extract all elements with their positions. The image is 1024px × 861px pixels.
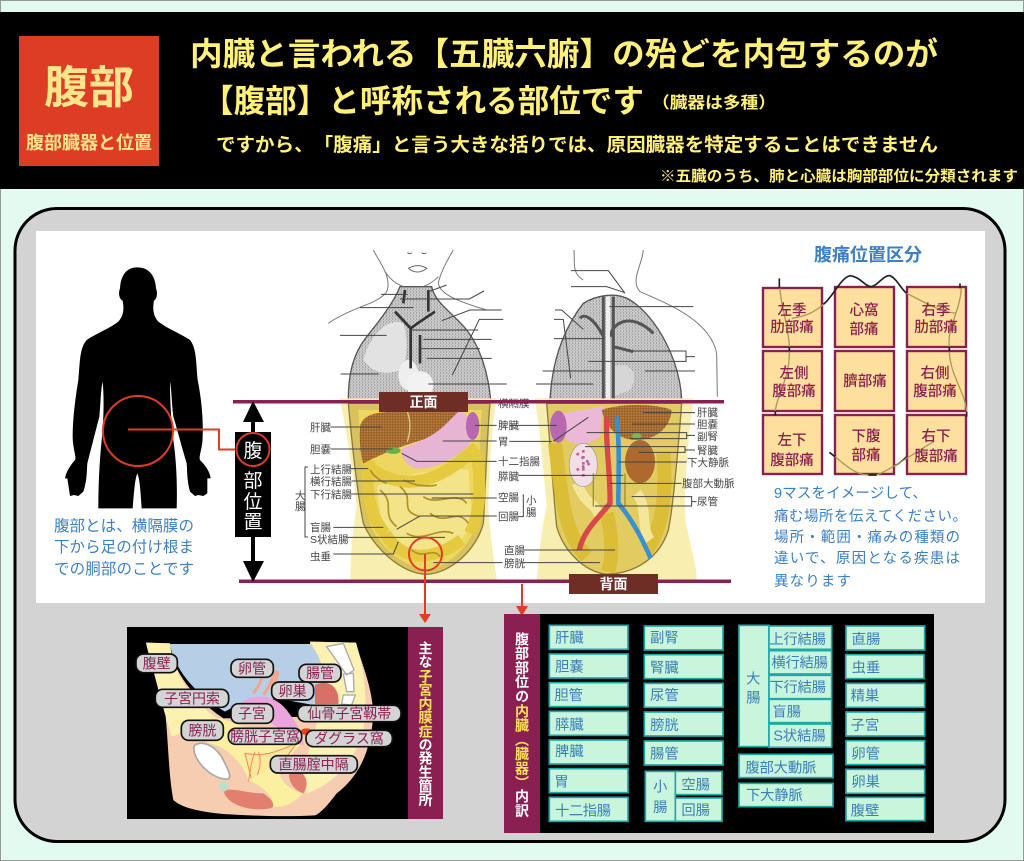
organ column 3 bbox=[739, 625, 833, 807]
organ labels: back right: 肝臓 bbox=[697, 407, 718, 419]
guidance text: 9マスをイメージして、 bbox=[774, 485, 927, 502]
nine square pain grid: 腹部痛 bbox=[772, 383, 816, 400]
small intestine group bbox=[645, 771, 722, 821]
guidance text: 違いで、原因となる疾患は bbox=[774, 550, 960, 567]
label: front view bbox=[379, 392, 468, 412]
pill labels: 仙骨子宮靱帯 bbox=[307, 705, 391, 721]
back view: abdomen bbox=[509, 398, 697, 579]
nine square pain grid: 右下 bbox=[922, 428, 950, 445]
caption: abdomen definition: 腹部とは、横隔膜の bbox=[54, 517, 194, 535]
organ labels: front right: 十二指腸 bbox=[498, 455, 540, 468]
nine square pain grid: 部痛 bbox=[850, 321, 878, 338]
large intestine group: S状結腸 bbox=[773, 728, 826, 745]
organ column 2: 腎臓 bbox=[650, 660, 679, 677]
organ labels: front left: 盲腸 bbox=[310, 522, 331, 534]
label: abdomen position: 位 bbox=[243, 491, 263, 513]
front view: abdomen bbox=[331, 398, 524, 579]
small intestine group: 回腸 bbox=[681, 802, 710, 819]
organ column 4: 虫垂 bbox=[852, 660, 880, 677]
nine square pain grid: 腹部痛 bbox=[913, 383, 957, 400]
organ column 4: 卵巣 bbox=[851, 774, 880, 791]
organ labels: front left: 下行結腸 bbox=[310, 488, 352, 501]
pill labels: 直腸腟中隔 bbox=[279, 756, 349, 772]
pill labels: 腸管 bbox=[306, 665, 334, 681]
organ column 2: 副腎 bbox=[650, 630, 679, 647]
organ labels: front right: 直腸 bbox=[504, 544, 525, 557]
organ column 2: 膀胱 bbox=[650, 717, 679, 734]
nine square pain grid: 右側 bbox=[920, 365, 950, 382]
nine square pain grid: 部痛 bbox=[852, 447, 880, 464]
pill labels: 腹壁 bbox=[143, 655, 171, 671]
organ column 1: 肝臓 bbox=[555, 630, 584, 647]
organ column 4: 卵管 bbox=[851, 746, 880, 763]
organ column 4 bbox=[846, 626, 925, 821]
organ labels: front left: S状結腸 bbox=[310, 533, 349, 546]
title block: 腹部: 腹部 bbox=[44, 62, 134, 113]
headline note: （臓器は多種） bbox=[652, 94, 776, 112]
organ labels: front left: 肝臓 bbox=[310, 422, 331, 434]
organ labels: front right: 回腸 bbox=[498, 511, 519, 523]
organ labels: front right: 空腸 bbox=[498, 492, 519, 504]
guidance text bbox=[774, 485, 967, 590]
organ labels: front left: 上行結腸 bbox=[310, 463, 352, 476]
footnote: ※五臓のうち、肺と心臓は胸部部位に分類されます bbox=[660, 167, 1018, 185]
large intestine group: 下行結腸 bbox=[769, 679, 826, 696]
nine square pain grid: 左季 bbox=[778, 302, 806, 319]
organ labels: front right bbox=[498, 397, 540, 570]
organ column 1: 十二指腸 bbox=[555, 802, 611, 819]
pill labels: 卵管 bbox=[238, 660, 266, 676]
caption: abdomen definition: 下から足の付け根ま bbox=[54, 538, 194, 556]
label: back view bbox=[569, 574, 658, 594]
panel: abdominal organs list bbox=[504, 614, 934, 833]
abdomen range lines bbox=[233, 400, 731, 583]
arrow to organ list bbox=[516, 584, 528, 616]
callout: abdomen circle and connector bbox=[103, 396, 238, 466]
organ column 4: 子宮 bbox=[851, 717, 879, 734]
nine square pain grid: 下腹 bbox=[852, 428, 881, 445]
nine square pain grid: 臍部痛 bbox=[843, 373, 887, 390]
nine square pain grid: 腹部痛 bbox=[770, 452, 814, 469]
organ column 4: 腹壁 bbox=[851, 802, 879, 819]
small intestine group: 空腸 bbox=[681, 776, 710, 793]
organ labels: front right: 小 bbox=[526, 495, 537, 507]
label: abdomen position: 腹 bbox=[243, 440, 263, 462]
small intestine group: 腸 bbox=[653, 800, 668, 816]
organ column 2: 腸管 bbox=[650, 746, 679, 763]
headline line 2: 【腹部】と呼称される部位です bbox=[202, 83, 644, 119]
caption: abdomen definition: での胴部のことです bbox=[54, 560, 194, 578]
nine square pain grid: 肋部痛 bbox=[770, 319, 814, 336]
label: abdomen position: 置 bbox=[243, 512, 263, 533]
large intestine group: 横行結腸 bbox=[771, 654, 828, 671]
small intestine group: 小 bbox=[653, 779, 668, 796]
organ labels: front left: 大 bbox=[295, 489, 306, 502]
organ labels: front right: 膀胱 bbox=[504, 558, 525, 570]
nine square pain grid: 心窩 bbox=[850, 301, 878, 319]
organ column 4: 精巣 bbox=[851, 688, 879, 705]
pill labels: 子宮 bbox=[238, 705, 266, 721]
guidance text: 場所・範囲・痛みの種類の bbox=[774, 528, 960, 546]
nine square pain grid: 右季 bbox=[922, 302, 950, 319]
organ labels: front left: 横行結腸 bbox=[310, 475, 352, 488]
organ labels: front left bbox=[295, 422, 352, 563]
guidance text: 異なります bbox=[774, 573, 851, 590]
organ column 3: 下大静脈 bbox=[746, 787, 803, 804]
organ labels: back right: 副腎 bbox=[697, 431, 718, 443]
back view: chest bbox=[536, 250, 717, 400]
organ labels: front left: 胆嚢 bbox=[310, 443, 331, 456]
organ column 1: 脾臓 bbox=[555, 743, 584, 760]
pill labels bbox=[136, 654, 401, 773]
body silhouette bbox=[65, 267, 211, 508]
guidance text: 痛む場所を伝えてください。 bbox=[774, 508, 967, 525]
side title: organ breakdown bbox=[504, 614, 540, 833]
organ column 1: 胃 bbox=[554, 775, 569, 791]
large intestine group: 上行結腸 bbox=[769, 631, 826, 648]
main panel bbox=[15, 208, 1005, 842]
side title: organ breakdown: 腹部部位の 内臓（臓器） 内訳 bbox=[514, 631, 530, 819]
label: front view: 正面 bbox=[410, 394, 438, 410]
pill labels: 膀胱 bbox=[188, 722, 216, 738]
arrow: abdominal range bbox=[243, 401, 264, 582]
label: abdomen position: 部 bbox=[243, 470, 263, 492]
nine square pain grid bbox=[763, 276, 967, 475]
nine square pain grid: 肋部痛 bbox=[914, 319, 958, 336]
organ column 2 bbox=[644, 626, 723, 821]
side title: endometriosis: 主な 子宮内膜症 の発生箇所 bbox=[418, 640, 434, 808]
organ labels: front right: 脾臓 bbox=[498, 419, 519, 432]
label: back view: 背面 bbox=[600, 576, 628, 592]
organ labels: front left: 虫垂 bbox=[310, 551, 331, 563]
organ labels: back right: 胆嚢 bbox=[697, 418, 718, 431]
large intestine group: 大 bbox=[746, 670, 761, 687]
organ labels: front left: 腸 bbox=[295, 501, 306, 513]
headline line 1: 内臓と言われる【五臓六腑】の殆どを内包するのが bbox=[190, 36, 938, 72]
title block: 腹部: 腹部臓器と位置 bbox=[26, 133, 152, 153]
white illustration area bbox=[36, 231, 985, 603]
nine square pain grid: 左下 bbox=[778, 432, 806, 449]
sub headline: ですから、「腹痛」と言う大きな括りでは、原因臓器を特定することはできません bbox=[216, 133, 938, 156]
pill labels: ダグラス窩 bbox=[314, 730, 384, 746]
organ column 1: 胆管 bbox=[554, 687, 583, 704]
anatomy illustrations bbox=[328, 250, 717, 579]
organ labels: back right bbox=[682, 407, 735, 508]
organ labels: back right: 腎臓 bbox=[697, 445, 718, 457]
pill labels: 卵巣 bbox=[279, 683, 307, 699]
organ column 1 bbox=[549, 625, 628, 821]
large intestine group bbox=[739, 625, 832, 747]
pelvic cross-section illustration bbox=[136, 642, 401, 816]
organ labels: front right: 膵臓 bbox=[498, 470, 519, 483]
organ column 3: 腹部大動脈 bbox=[745, 760, 816, 777]
label: abdomen position bbox=[235, 432, 271, 537]
organ labels: back right: 下大静脈 bbox=[687, 456, 729, 469]
nine square pain grid: 腹部痛 bbox=[914, 448, 958, 465]
organ labels: back right: 腹部大動脈 bbox=[682, 477, 735, 490]
organ labels: front right: 胃 bbox=[498, 436, 508, 448]
header banner bbox=[0, 12, 1024, 189]
pain position title: 腹痛位置区分 bbox=[814, 245, 922, 265]
organ column 4: 直腸 bbox=[852, 631, 880, 648]
large intestine group: 腸 bbox=[746, 691, 761, 707]
organ labels: front right: 腸 bbox=[526, 507, 537, 519]
side title: endometriosis bbox=[408, 627, 443, 819]
panel: endometriosis sites bbox=[127, 627, 443, 819]
organ labels: front right: 横隔膜 bbox=[498, 397, 530, 410]
pill labels: 膀胱子宮窩 bbox=[230, 728, 300, 744]
nine square pain grid: 左側 bbox=[780, 365, 808, 382]
front view: chest bbox=[328, 250, 507, 400]
pill labels: 子宮円索 bbox=[164, 690, 220, 706]
organ column 1: 膵臓 bbox=[555, 716, 584, 733]
caption: abdomen definition bbox=[54, 517, 194, 578]
organ column 1: 胆嚢 bbox=[555, 658, 584, 675]
title block: 腹部 bbox=[19, 36, 159, 166]
red circle on pelvis with arrow bbox=[409, 538, 442, 623]
organ labels: back right: 尿管 bbox=[697, 495, 718, 508]
large intestine group: 盲腸 bbox=[772, 704, 801, 721]
organ column 2: 尿管 bbox=[650, 687, 679, 704]
